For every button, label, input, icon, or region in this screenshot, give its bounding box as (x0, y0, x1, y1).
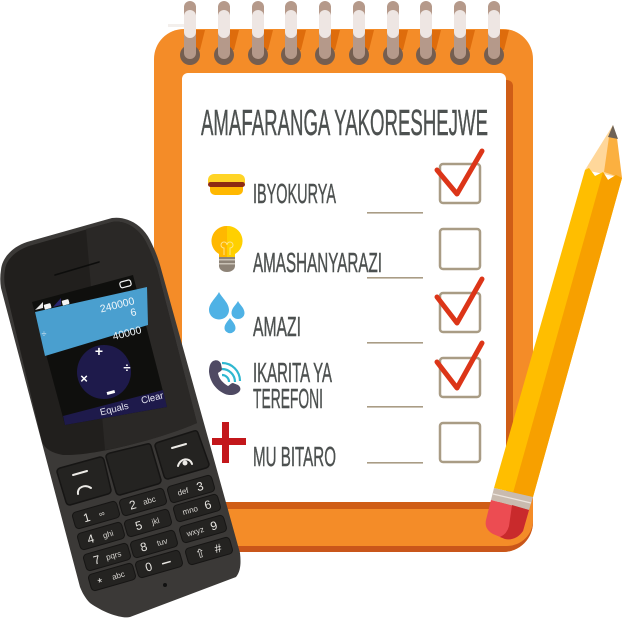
line: phone card (367, 406, 423, 408)
microphone (163, 583, 167, 587)
keypad: 2 (128, 497, 138, 513)
keypad: 6 (203, 497, 213, 513)
keypad: ∞ (98, 509, 106, 519)
screen: Equals (99, 401, 130, 418)
screen: + (95, 343, 103, 359)
checkbox: electricity (440, 229, 480, 269)
label: phone card: TEREFONI (253, 383, 323, 414)
keypad: tuv (156, 536, 169, 548)
label: hospital: MU BITARO (253, 441, 336, 472)
keypad: 8 (139, 539, 149, 555)
screen: 40000 (111, 324, 143, 343)
screen: 240000 (99, 295, 136, 315)
keypad: mno (181, 504, 199, 517)
label: water: AMAZI (253, 311, 301, 342)
line: water (367, 342, 423, 344)
keypad: 3 (195, 479, 205, 494)
keypad: # (213, 541, 223, 556)
icon: burger (208, 174, 245, 195)
icon: red cross (212, 422, 246, 463)
check mark: water (437, 279, 482, 323)
check mark: food (437, 151, 482, 194)
label: phone card (253, 357, 332, 414)
screen: × (80, 371, 88, 386)
keypad: wxyz (185, 525, 205, 539)
label: electricity: AMASHANYARAZI (253, 247, 382, 278)
pencil (486, 125, 622, 539)
keypad (72, 474, 233, 592)
label: phone card: IKARITA YA (253, 357, 332, 388)
keypad: * (96, 575, 105, 590)
icon: water drops (209, 292, 244, 333)
label: food: IBYOKURYA (253, 178, 336, 209)
screen: Clear (140, 390, 165, 407)
keypad: ghi (102, 529, 115, 540)
call icons (73, 444, 192, 494)
spiral rings (180, 1, 509, 65)
icon: light bulb (211, 226, 243, 272)
icon: phone call (209, 360, 240, 395)
keypad: jkl (150, 516, 161, 527)
screen: ÷ (42, 329, 47, 339)
keypad: abc (111, 570, 126, 582)
screen (32, 275, 167, 425)
line: electricity (367, 277, 423, 279)
screen: 6 (129, 306, 138, 319)
keypad: 9 (209, 518, 219, 534)
checkbox: water (440, 293, 480, 332)
mobile phone (0, 218, 241, 617)
screen: ÷ (123, 360, 131, 375)
check mark: phone card (437, 343, 482, 388)
checkbox: food (440, 164, 480, 203)
soft keys (57, 431, 209, 505)
keypad: 4 (86, 531, 96, 547)
keypad: 7 (92, 552, 102, 568)
keypad: 0 (144, 559, 154, 575)
speaker (55, 262, 99, 275)
keypad: 5 (134, 518, 144, 533)
checkbox: hospital (440, 423, 480, 462)
line: hospital (367, 462, 423, 464)
keypad: pqrs (105, 549, 122, 562)
keypad: ⇧ (194, 545, 207, 562)
line: food (367, 212, 423, 214)
keypad: 1 (82, 510, 92, 525)
keypad: abc (142, 495, 157, 507)
keypad: def (176, 486, 190, 498)
notebook (154, 1, 533, 552)
checkbox: phone card (440, 358, 480, 397)
